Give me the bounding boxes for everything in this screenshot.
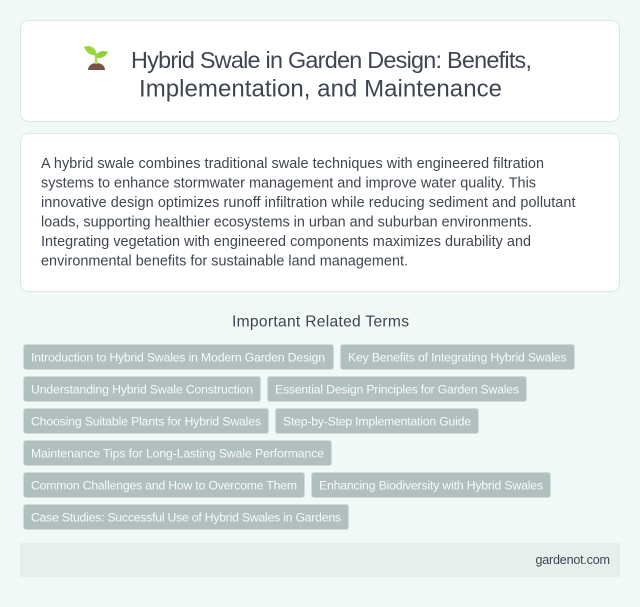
text block: description paragraph bbox=[41, 156, 576, 270]
tag: case studies bbox=[24, 504, 348, 530]
title: Implementation, and Maintenance bbox=[139, 76, 502, 102]
tag: construction: Understanding Hybrid Swale Construction bbox=[31, 382, 253, 396]
text block: description paragraph: innovative design optimizes runoff infiltration while reducing sediment and pollutant bbox=[41, 195, 576, 211]
tag: implementation guide bbox=[276, 408, 478, 434]
text block: description paragraph: Integrating vegetation with engineered components maximizes durability and bbox=[41, 234, 531, 250]
tag: design principles: Essential Design Principles for Garden Swales bbox=[275, 382, 519, 396]
title: Hybrid Swale in Garden Design: Benefits, bbox=[131, 47, 532, 73]
tag: design principles bbox=[268, 376, 526, 402]
tag: maintenance tips bbox=[24, 440, 332, 466]
footer bbox=[20, 543, 620, 577]
footer: gardenot.com bbox=[536, 553, 610, 567]
tag: suitable plants bbox=[24, 408, 268, 434]
tag: maintenance tips: Maintenance Tips for Long-Lasting Swale Performance bbox=[31, 446, 324, 460]
tag: introduction bbox=[24, 344, 334, 370]
text block: description paragraph: environmental benefits for sustainable land management. bbox=[41, 254, 408, 270]
panel: description bbox=[20, 134, 620, 292]
text block: description paragraph: A hybrid swale combines traditional swale techniques with engineered filtration bbox=[41, 156, 544, 172]
tag: common challenges bbox=[24, 472, 304, 498]
tag: biodiversity bbox=[312, 472, 550, 498]
tag: common challenges: Common Challenges and How to Overcome Them bbox=[31, 478, 297, 492]
tag: implementation guide: Step-by-Step Implementation Guide bbox=[283, 414, 471, 428]
panel: title header bbox=[20, 20, 620, 122]
text block: description paragraph: loads, supporting healthier ecosystems in urban and suburban environments. bbox=[41, 214, 532, 230]
heading: related terms: Important Related Terms bbox=[232, 314, 409, 330]
icon: sprout bbox=[84, 46, 108, 70]
panel: related term tags bbox=[24, 344, 574, 530]
tag: introduction: Introduction to Hybrid Swales in Modern Garden Design bbox=[31, 350, 325, 364]
tag: key benefits: Key Benefits of Integrating Hybrid Swales bbox=[348, 350, 566, 364]
tag: biodiversity: Enhancing Biodiversity with Hybrid Swales bbox=[319, 478, 543, 492]
tag: construction bbox=[24, 376, 260, 402]
tag: case studies: Case Studies: Successful Use of Hybrid Swales in Gardens bbox=[31, 510, 341, 524]
tag: suitable plants: Choosing Suitable Plants for Hybrid Swales bbox=[31, 414, 261, 428]
title bbox=[131, 47, 532, 102]
text block: description paragraph: systems to enhance stormwater management and improve water quality. This bbox=[41, 176, 536, 192]
tag: key benefits bbox=[340, 344, 574, 370]
